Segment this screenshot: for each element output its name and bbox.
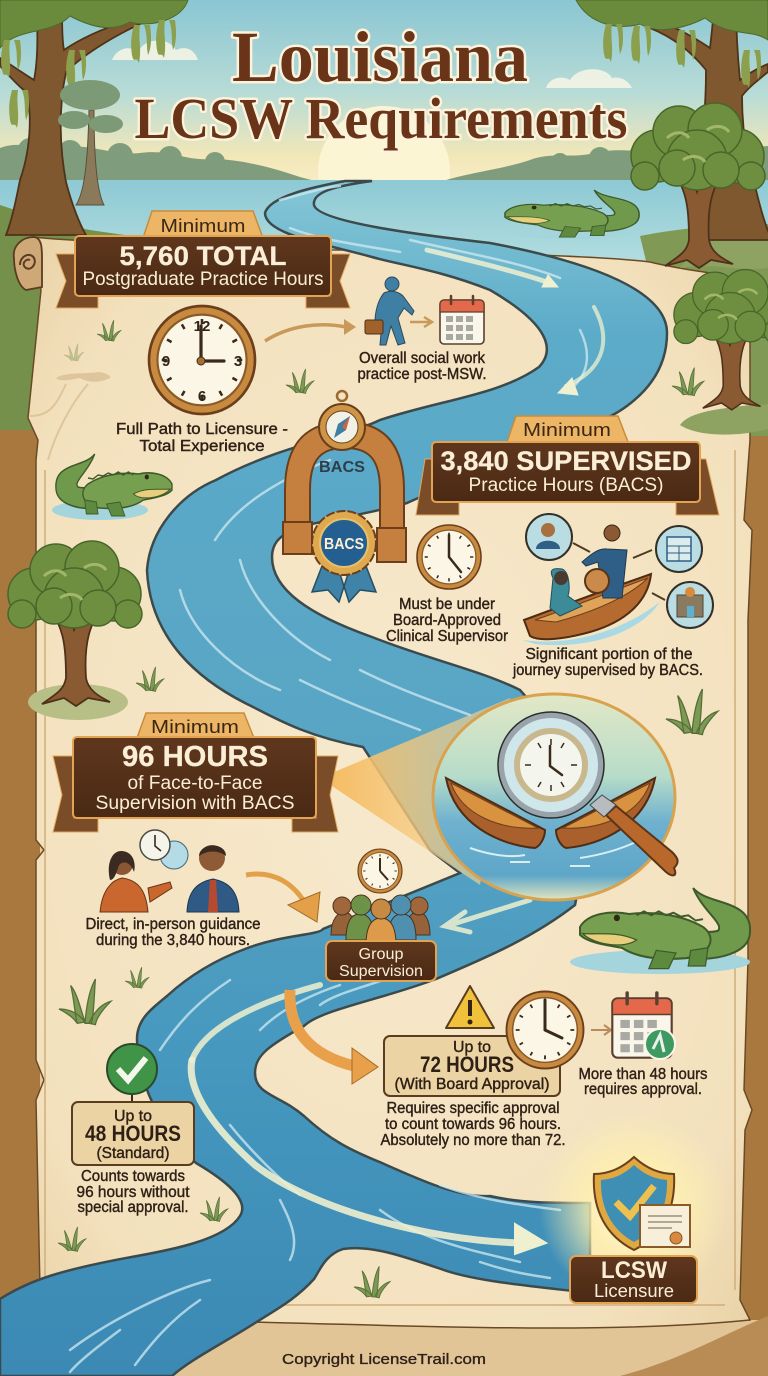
icon: walking professional xyxy=(365,277,432,345)
callout lens: two boats xyxy=(433,694,678,900)
text: requires specific approval: Absolutely no more than 72. xyxy=(380,1132,566,1149)
arrow to walking person xyxy=(265,319,356,341)
text: significant portion: journey supervised by BACS. xyxy=(512,662,703,679)
icon: green check xyxy=(107,1044,157,1102)
text: counts towards: Counts towards xyxy=(81,1168,185,1185)
green ground under right tree xyxy=(680,228,768,435)
text: direct guidance: Direct, in-person guidance xyxy=(86,916,260,933)
arch: BACS gate xyxy=(283,422,406,562)
text: direct guidance: during the 3,840 hours. xyxy=(96,932,250,949)
box: 48 hours: (Standard) xyxy=(96,1145,170,1162)
tree: left xyxy=(8,541,142,720)
clouds xyxy=(112,40,632,88)
alligator: left xyxy=(52,454,172,520)
banner: 96 hours: of Face-to-Face xyxy=(128,773,262,794)
icon: warning triangle xyxy=(446,986,494,1028)
banner: 5,760 total: Postgraduate Practice Hours xyxy=(82,269,324,290)
banner: 96 hours: Supervision with BACS xyxy=(96,793,294,814)
box: LCSW licensure: Licensure xyxy=(594,1281,674,1301)
text: more than 48 xyxy=(578,1066,708,1098)
clock: total hours: 6 xyxy=(198,388,206,405)
tree: right lower xyxy=(674,270,768,410)
text: overall practice: practice post-MSW. xyxy=(358,366,486,383)
text: board approved: Clinical Supervisor xyxy=(386,628,508,645)
text: requires specific approval: Requires specific approval xyxy=(386,1100,560,1117)
medal: BACS: BACS xyxy=(324,536,364,553)
banner: 5,760 total: 5,760 TOTAL xyxy=(120,241,286,271)
background: sky xyxy=(0,0,768,190)
label: group supervision xyxy=(326,941,436,981)
box: 48 hours xyxy=(72,1102,194,1165)
title xyxy=(134,17,628,151)
icon: calendar with approval xyxy=(612,993,675,1059)
clock: total hours xyxy=(149,306,255,414)
text: requires specific approval xyxy=(380,1100,566,1149)
arrow to group xyxy=(246,874,320,922)
text: full path xyxy=(116,421,288,455)
box: 48 hours: Up to xyxy=(114,1108,152,1125)
banner: 3,840 supervised xyxy=(416,416,719,515)
glow behind shield xyxy=(539,1113,729,1303)
text: board approved: Must be under xyxy=(399,596,495,613)
text: counts towards xyxy=(76,1168,190,1216)
parchment map xyxy=(28,237,752,1328)
banner: 5,760 total: Minimum xyxy=(160,216,246,236)
icon: shield with certificate xyxy=(594,1157,690,1250)
icon: calendar xyxy=(440,296,484,344)
text: full path: Full Path to Licensure - xyxy=(116,421,288,438)
box: LCSW licensure: LCSW xyxy=(601,1257,667,1284)
banner: 96 hours: Minimum xyxy=(151,717,239,737)
text: counts towards: 96 hours without xyxy=(76,1184,190,1201)
sun xyxy=(318,106,450,238)
banner: 96 hours xyxy=(53,713,338,832)
text: more than 48: More than 48 hours xyxy=(578,1066,708,1083)
banner: 3,840 supervised: 3,840 SUPERVISED xyxy=(440,446,692,476)
text: direct guidance xyxy=(86,916,260,949)
arch: BACS gate: BACS xyxy=(319,459,365,476)
text: board approved: Board-Approved xyxy=(393,612,501,629)
river xyxy=(0,181,667,1376)
faded map mark xyxy=(30,372,110,460)
box: 72 hours: Up to xyxy=(453,1039,491,1056)
icon: group with clock xyxy=(331,849,430,945)
banner: 3,840 supervised: Practice Hours (BACS) xyxy=(468,475,664,496)
banner: 96 hours: 96 HOURS xyxy=(122,741,268,773)
clock: total hours: 3 xyxy=(234,353,242,370)
label: group supervision: Supervision xyxy=(339,963,423,980)
tree: right upper xyxy=(631,103,765,268)
medal: BACS xyxy=(312,511,376,602)
text: counts towards: special approval. xyxy=(78,1199,188,1216)
river current streaks xyxy=(70,186,587,1372)
clock: total hours: 12 xyxy=(194,318,210,335)
icon group: supervised boat xyxy=(522,514,713,645)
text: full path: Total Experience xyxy=(140,438,264,455)
banner: 5,760 total xyxy=(56,211,350,308)
scroll curl xyxy=(14,237,42,290)
arrow to 72 hours xyxy=(290,990,378,1084)
background: lake xyxy=(0,180,768,270)
parchment inner border xyxy=(45,450,735,1305)
text: significant portion: Significant portion of the xyxy=(526,646,692,663)
clock: under supervisor xyxy=(417,525,481,589)
label: group supervision: Group xyxy=(358,946,404,963)
river cream current xyxy=(191,250,603,1254)
compass xyxy=(319,391,365,450)
clock: total hours: 9 xyxy=(162,353,170,370)
copyright: Copyright LicenseTrail.com xyxy=(282,1351,486,1368)
distant cypress tree xyxy=(58,80,123,205)
box: 48 hours: 48 HOURS xyxy=(85,1121,181,1146)
grass tufts xyxy=(58,320,718,1298)
title: LCSW Requirements xyxy=(134,86,628,151)
text: requires specific approval: to count towards 96 hours. xyxy=(385,1116,561,1133)
text: significant portion xyxy=(512,646,703,679)
text: overall practice xyxy=(358,350,486,383)
big tree: top left xyxy=(0,0,188,235)
small arrow to calendar xyxy=(591,1025,611,1035)
banner: 3,840 supervised: Minimum xyxy=(523,420,611,440)
callout beam xyxy=(320,698,510,885)
title: Louisiana xyxy=(232,17,528,97)
text: board approved xyxy=(386,596,508,645)
icon: two people talking xyxy=(100,830,239,912)
alligator: top right xyxy=(505,190,639,239)
box: 72 hours xyxy=(384,1036,560,1096)
text: overall practice: Overall social work xyxy=(359,350,485,367)
big tree: top right xyxy=(576,0,768,240)
distant treeline xyxy=(0,138,768,185)
box: 72 hours: (With Board Approval) xyxy=(394,1076,550,1093)
text: more than 48: requires approval. xyxy=(584,1081,702,1098)
box: LCSW licensure xyxy=(570,1256,697,1303)
clock: approval xyxy=(506,992,584,1068)
box: 72 hours: 72 HOURS xyxy=(420,1052,514,1077)
alligator: lower right xyxy=(570,888,750,974)
